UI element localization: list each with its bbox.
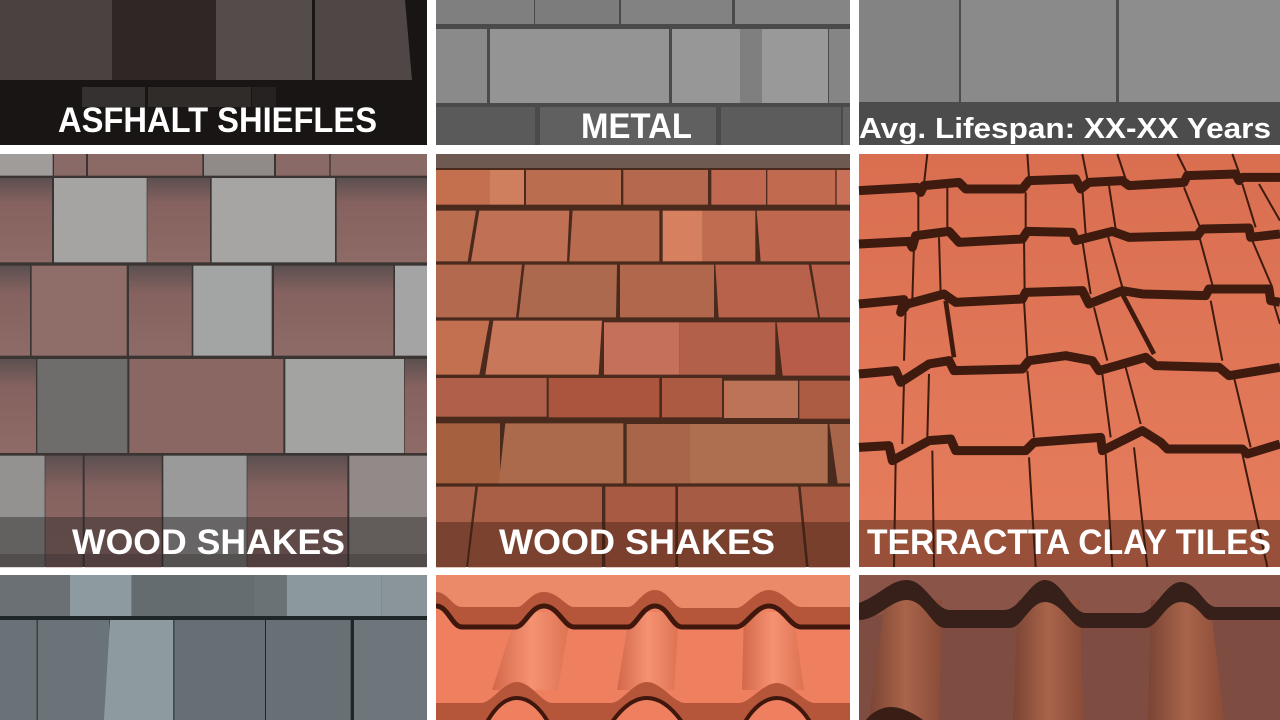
panel: orange barrel tiles	[436, 575, 850, 720]
panel: metal	[436, 0, 850, 146]
panel: dark barrel tiles	[859, 575, 1280, 720]
heading: terracotta clay tiles: TERRACTTA CLAY TILES	[867, 523, 1271, 562]
panel: terracotta clay tiles	[859, 154, 1280, 567]
panel: slate tiles	[0, 575, 427, 720]
panel: wood shakes, mixed shingles	[0, 154, 427, 567]
caption: average lifespan: Avg. Lifespan: XX-XX Years	[859, 113, 1271, 145]
heading: metal: METAL	[581, 107, 692, 146]
heading: wood shakes left: WOOD SHAKES	[72, 523, 345, 562]
heading: asphalt shingles: ASFHALT SHIEFLES	[58, 101, 377, 140]
panel: wood shakes, brick red	[436, 154, 850, 567]
panel: lifespan	[859, 0, 1280, 145]
heading: wood shakes center: WOOD SHAKES	[499, 523, 775, 562]
panel: asphalt shingles	[0, 0, 427, 145]
